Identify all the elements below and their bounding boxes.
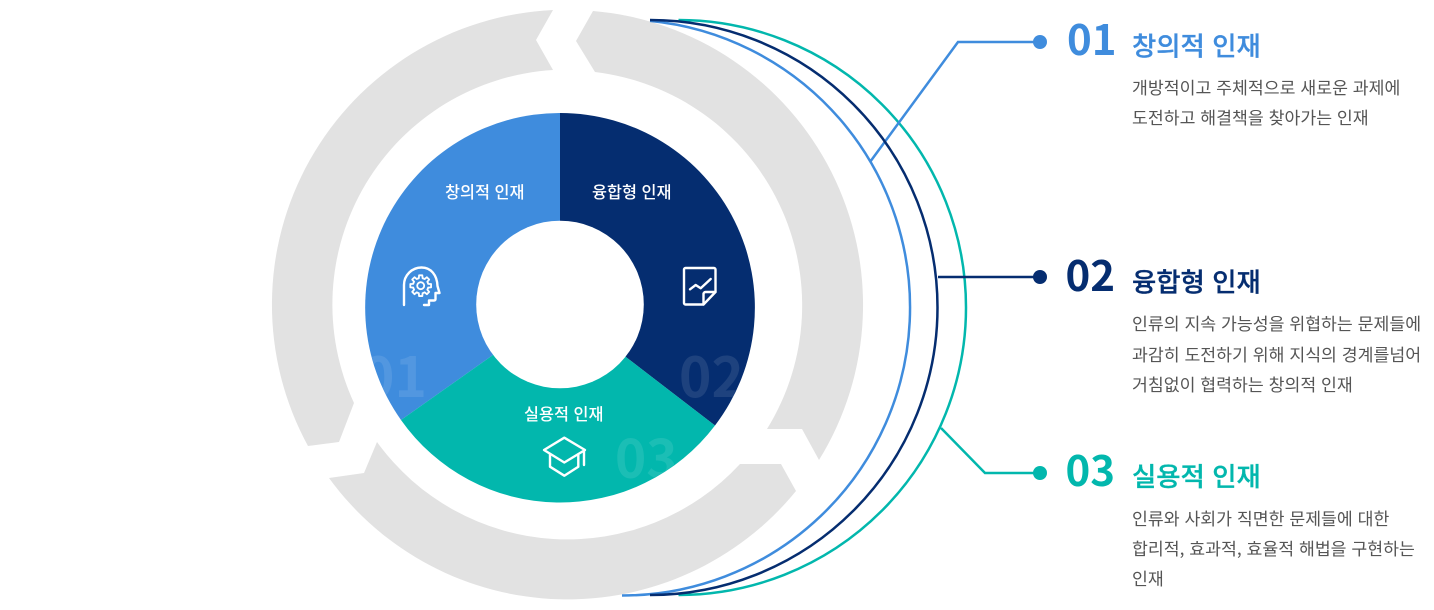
segment: 01 creative <box>365 113 560 420</box>
description 01 <box>1132 74 1400 129</box>
ghost numbers: 03 <box>615 418 678 494</box>
item 02 <box>1066 243 1421 396</box>
donut chart <box>362 113 755 502</box>
description 03: 합리적, 효과적, 효율적 해법을 구현하는 <box>1132 535 1415 560</box>
icon: head with gear <box>404 268 440 305</box>
segment: 02 convergent <box>560 113 755 425</box>
number 01: 01 <box>1067 7 1117 68</box>
ring arrow: left <box>272 10 553 446</box>
heading 01: 창의적 인재 <box>1132 24 1261 64</box>
item 03 <box>1066 438 1415 590</box>
description 01: 도전하고 해결책을 찾아가는 인재 <box>1132 104 1369 129</box>
segment label: 융합형 인재: 융합형 인재 <box>592 179 671 203</box>
description 02 <box>1132 310 1421 396</box>
description 03 <box>1132 505 1415 590</box>
number 02: 02 <box>1066 243 1115 304</box>
description 02: 과감히 도전하기 위해 지식의 경계를넘어 <box>1132 341 1421 366</box>
description 01: 개방적이고 주체적으로 새로운 과제에 <box>1132 74 1400 99</box>
donut hole <box>476 221 644 388</box>
description 02: 인류의 지속 가능성을 위협하는 문제들에 <box>1132 310 1421 335</box>
outer grey cycle ring <box>272 10 863 599</box>
description 02: 거침없이 협력하는 창의적 인재 <box>1132 371 1353 396</box>
segment label: 실용적 인재: 실용적 인재 <box>524 401 603 425</box>
item 01 <box>1067 7 1400 129</box>
heading 03: 실용적 인재 <box>1132 455 1261 494</box>
ghost numbers: 01 <box>362 333 427 413</box>
ghost numbers <box>372 356 740 478</box>
description 03: 인재 <box>1132 565 1164 590</box>
description 03: 인류와 사회가 직면한 문제들에 대한 <box>1132 505 1390 530</box>
segment label: 창의적 인재: 창의적 인재 <box>445 179 524 203</box>
ring arrow: top right <box>576 11 863 460</box>
number 03: 03 <box>1066 438 1115 499</box>
segment: 03 practical <box>401 304 715 502</box>
icon: graduation cap <box>544 438 585 476</box>
icon: document with chart <box>684 268 716 304</box>
arc: teal <box>678 20 1040 595</box>
connector dot: 01 <box>1033 35 1047 49</box>
heading 02: 융합형 인재 <box>1132 260 1261 300</box>
connector dot: 02 <box>1033 270 1047 284</box>
ghost numbers: 02 <box>679 333 744 413</box>
ring arrow: bottom <box>329 442 796 599</box>
arc: navy <box>650 20 1040 595</box>
connector dot: 03 <box>1033 466 1047 480</box>
arc: blue <box>622 21 1040 596</box>
curved lines and connectors <box>622 20 1040 596</box>
